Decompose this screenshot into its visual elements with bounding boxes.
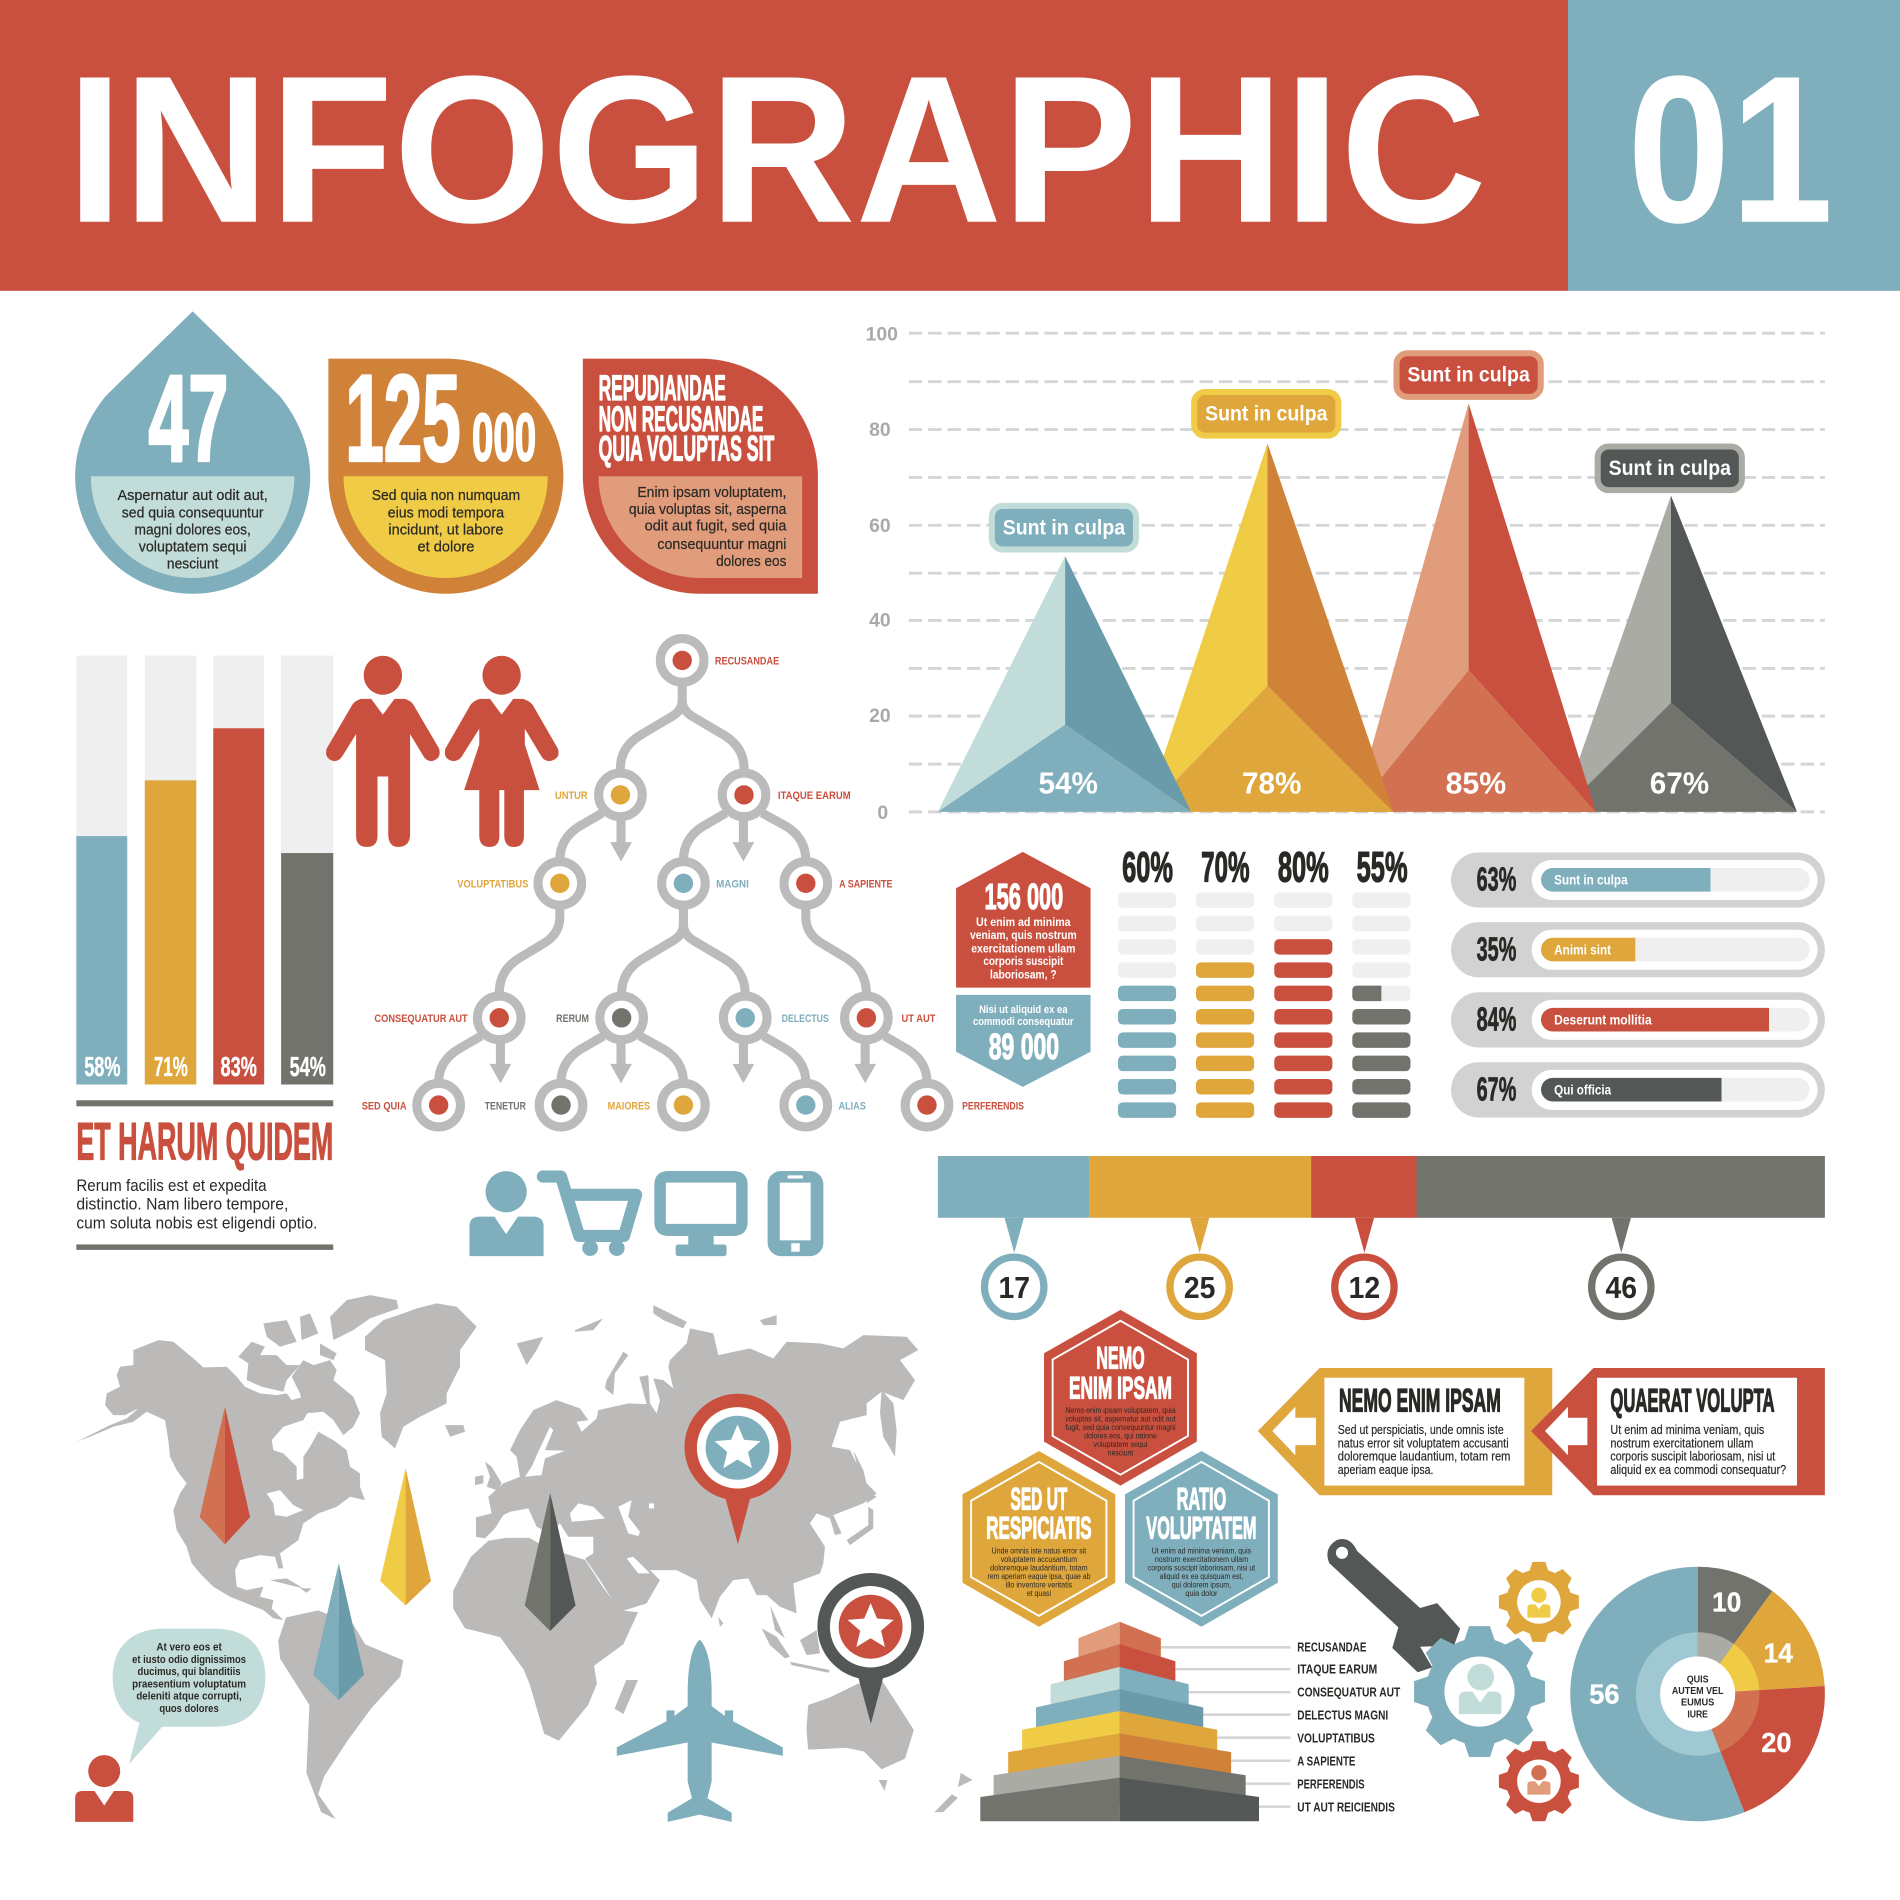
y axis labels: 100: [866, 323, 898, 345]
hexagon: sed ut respiciatis: et quasi: [1027, 1589, 1051, 1598]
drop panel: 47: nesciunt: [167, 555, 219, 572]
icon: person: [469, 1171, 544, 1256]
tree nodes: [417, 639, 949, 1127]
callout: 46: 46: [1606, 1272, 1637, 1305]
text block: et harum quidem: [76, 1100, 333, 1250]
map pin: red star pin: [685, 1394, 791, 1544]
drop panel: repudiandae: Enim ipsam voluptatem,: [637, 484, 786, 501]
tree labels: VOLUPTATIBUS: [457, 879, 528, 891]
map marker: dark spear: [525, 1493, 576, 1631]
stat: 89 000: Nisi ut aliquid ex ea: [979, 1004, 1068, 1016]
y axis labels: 60: [869, 515, 891, 537]
pyramid leader lines: [1161, 1647, 1290, 1807]
hexagon: sed ut respiciatis: RESPICIATIS: [986, 1510, 1092, 1546]
y axis labels: 40: [869, 609, 891, 631]
tooltip: red: Sunt in culpa: [1407, 364, 1530, 387]
stat: 89 000: commodi consequatur: [973, 1016, 1074, 1028]
icon: blue gear: [1414, 1626, 1545, 1757]
callout: 17: [985, 1257, 1044, 1317]
pill 63%: 63%: [1477, 862, 1516, 899]
chart: stepped pyramid: [980, 1622, 1400, 1821]
drop panel: 47: [75, 311, 310, 594]
arrow box: nemo enim ipsam: Sed ut perspiciatis, unde omnis iste: [1338, 1422, 1504, 1437]
callout: 25: 25: [1184, 1272, 1215, 1305]
y axis labels: 0: [877, 802, 888, 824]
pyramid labels: [1297, 1640, 1400, 1815]
stat: 89 000: [956, 995, 1091, 1087]
chart: donut pie: 20: [1761, 1727, 1792, 1758]
hexagon: sed ut respiciatis: [962, 1451, 1115, 1627]
tooltip: blue: Sunt in culpa: [1003, 516, 1125, 539]
chart: vertical bars: 54%: [290, 1051, 326, 1082]
hexagon: sed ut respiciatis: Unde omnis iste natus error sit: [992, 1546, 1087, 1555]
pill 84%: 84%: [1477, 1002, 1516, 1039]
stat: 89 000: 89 000: [989, 1026, 1059, 1067]
chart: donut pie: 14: [1764, 1638, 1793, 1669]
hexagon: sed ut respiciatis: rem aperiam eaque ipsa, quae ab: [987, 1572, 1091, 1581]
stat: 156 000: Ut enim ad minima: [976, 915, 1071, 929]
tree labels: UNTUR: [555, 790, 588, 802]
pill 67%: [1451, 1062, 1825, 1117]
column headings: 60%: [1122, 844, 1173, 891]
pyramid layers: [980, 1622, 1259, 1821]
pyramid: 67%: [1561, 496, 1797, 812]
icon: cart: [543, 1177, 636, 1256]
world map: [77, 1295, 973, 1819]
callout: 46: [1592, 1257, 1651, 1317]
stat: 156 000: corporis suscipit: [983, 954, 1063, 968]
pill 35%: Animi sint: [1554, 941, 1611, 957]
chart: donut pie: QUIS: [1687, 1675, 1709, 1686]
chart: segmented columns: [1118, 844, 1410, 1118]
arrow box: quaerat volupta: nostrum exercitationem ullam: [1610, 1435, 1753, 1450]
tree labels: TENETUR: [485, 1100, 526, 1112]
chart: donut pie: AUTEM VEL: [1672, 1686, 1723, 1697]
chart: donut pie: 10: [1712, 1587, 1741, 1618]
issue number: 01: [1627, 33, 1833, 267]
callout: speech bubble: ducimus, qui blanditiis: [138, 1666, 241, 1678]
callout: speech bubble: praesentium voluptatum: [132, 1678, 246, 1690]
drop panel: repudiandae: NON RECUSANDAE: [599, 400, 763, 439]
drop panel: 47: 47: [148, 349, 228, 486]
pill 63%: Sunt in culpa: [1554, 872, 1628, 888]
hexagon: nemo enim ipsam: [1044, 1310, 1197, 1486]
tree connectors: [439, 685, 927, 1082]
hexagon: nemo enim ipsam: dolores eos, qui ratione: [1084, 1431, 1157, 1440]
arrow box: quaerat volupta: aliquid ex ea commodi consequatur?: [1610, 1462, 1786, 1477]
stat: 156 000: laboriosam, ?: [990, 967, 1057, 981]
column headings: 70%: [1201, 844, 1250, 891]
drop panel: repudiandae: QUIA VOLUPTAS SIT: [599, 429, 775, 468]
tree labels: [362, 656, 1024, 1112]
chart: vertical bars: [76, 656, 333, 1085]
map: southern continents: [278, 1538, 973, 1819]
arrow box: nemo enim ipsam: NEMO ENIM IPSAM: [1339, 1382, 1501, 1419]
column headings: 55%: [1357, 844, 1408, 891]
callout: speech bubble: [113, 1629, 265, 1764]
drop panel: repudiandae: quia voluptas sit, asperna: [629, 501, 787, 518]
arrow box: nemo enim ipsam: [1258, 1368, 1552, 1495]
column 80%: [1274, 892, 1332, 1118]
arrow box: nemo enim ipsam: natus error sit voluptatem accusanti: [1338, 1435, 1509, 1450]
column 70%: [1196, 892, 1254, 1118]
hexagon: nemo enim ipsam: ENIM IPSAM: [1069, 1369, 1172, 1405]
tree arrows: [490, 842, 876, 1083]
text block: et harum quidem: Rerum facilis est et expedita: [76, 1177, 267, 1195]
icon: yellow gear: [1499, 1562, 1579, 1642]
drop panel: 125 000: 000: [472, 401, 536, 475]
pill 35%: 35%: [1477, 931, 1516, 968]
callout: speech bubble: et iusto odio dignissimos: [132, 1654, 246, 1666]
callout: 25: [1170, 1257, 1229, 1317]
chart: donut pie: 56: [1589, 1679, 1619, 1710]
icon: phone: [768, 1171, 823, 1256]
stat: 156 000: [956, 852, 1091, 988]
callout: 12: [1335, 1257, 1394, 1317]
hexagon: sed ut respiciatis: illo inventore veritatis: [1006, 1580, 1072, 1589]
hexagon: nemo enim ipsam: NEMO: [1096, 1340, 1145, 1376]
hexagon: ratio voluptatem: quia dolor: [1185, 1589, 1218, 1598]
hexagon: ratio voluptatem: VOLUPTATEM: [1146, 1510, 1257, 1546]
chart: pyramid area chart: [866, 323, 1825, 824]
map marker: yellow spear: [380, 1468, 431, 1606]
pyramid: 85%: 85%: [1446, 768, 1506, 801]
pill 84%: Deserunt mollitia: [1554, 1012, 1652, 1028]
header banner: [0, 0, 1900, 291]
stat: 156 000: 156 000: [985, 876, 1063, 917]
pyramid: 54%: [938, 556, 1191, 812]
tree node centres: [429, 651, 937, 1115]
icon: monitor: [654, 1171, 748, 1256]
chart: vertical bars: 83%: [221, 1051, 257, 1082]
column headings: [1122, 844, 1408, 891]
map: americas north: [77, 1295, 502, 1620]
drop panel: repudiandae: odit aut fugit, sed quia: [645, 518, 787, 535]
hexagon: ratio voluptatem: RATIO: [1177, 1480, 1226, 1516]
pyramid: 85%: [1354, 404, 1596, 812]
tree labels: RECUSANDAE: [715, 656, 779, 668]
hexagon: ratio voluptatem: [1125, 1451, 1278, 1627]
hexagon: nemo enim ipsam: voluptatem sequi: [1094, 1440, 1148, 1449]
pyramid: 54%: 54%: [1038, 768, 1098, 801]
pyramid labels: CONSEQUATUR AUT: [1297, 1684, 1400, 1699]
chart: vertical bars: 58%: [84, 1051, 121, 1082]
pill 67%: Qui officia: [1554, 1081, 1611, 1097]
hexagon: sed ut respiciatis: doloremque laudantium, totam: [990, 1563, 1088, 1572]
pyramid labels: A SAPIENTE: [1297, 1753, 1355, 1768]
text block: et harum quidem: distinctio. Nam libero tempore,: [76, 1195, 288, 1213]
column 55%: [1352, 892, 1410, 1118]
text block: et harum quidem: cum soluta nobis est eligendi optio.: [76, 1215, 317, 1233]
icon: red person: [75, 1755, 133, 1822]
tree labels: DELECTUS: [782, 1013, 829, 1025]
map pin: dark star pin: [817, 1573, 924, 1724]
chart: donut pie: EUMUS: [1681, 1698, 1714, 1709]
drop panel: 47: Aspernatur aut odit aut,: [118, 487, 268, 504]
arrow box: quaerat volupta: [1531, 1368, 1825, 1495]
hexagon: ratio voluptatem: corporis suscipit laboriosam, nisi ut: [1148, 1563, 1256, 1572]
pill 63%: [1451, 852, 1825, 908]
pyramid labels: RECUSANDAE: [1297, 1640, 1366, 1655]
tree labels: MAIORES: [608, 1100, 650, 1112]
tree diagram: [362, 639, 1024, 1127]
title: INFOGRAPHIC: [67, 33, 1487, 267]
tree labels: CONSEQUATUR AUT: [374, 1013, 468, 1025]
pyramid labels: PERFERENDIS: [1297, 1777, 1365, 1792]
tree labels: ITAQUE EARUM: [778, 790, 851, 802]
hexagon: nemo enim ipsam: fugit, sed quia consequuntur magni: [1065, 1423, 1176, 1432]
drop panel: 47: voluptatem sequi: [139, 538, 247, 555]
drop panel: repudiandae: REPUDIANDAE: [599, 369, 726, 408]
drop panel: repudiandae: consequuntur magni: [657, 536, 786, 553]
hexagon: ratio voluptatem: qui dolorem ipsum,: [1172, 1580, 1231, 1589]
tree labels: PERFERENDIS: [962, 1100, 1024, 1112]
arrow box: nemo enim ipsam: doloremque laudantium, totam rem: [1338, 1449, 1510, 1464]
map marker: blue spear: [313, 1563, 364, 1700]
hexagon: nemo enim ipsam: voluptas sit, aspernatur aut odit aut: [1065, 1414, 1176, 1423]
icons row: [469, 1171, 823, 1256]
drop panel: 125 000: eius modi tempora: [388, 504, 505, 521]
icon: red gear: [1499, 1741, 1579, 1821]
drop panel: 125 000: Sed quia non numquam: [372, 487, 520, 504]
pyramid: 78%: [1145, 443, 1393, 812]
hexagon: nemo enim ipsam: nesciunt: [1108, 1448, 1134, 1457]
hexagon: sed ut respiciatis: voluptatem accusantium: [1001, 1555, 1077, 1564]
pyramid labels: VOLUPTATIBUS: [1297, 1730, 1375, 1745]
pill 67%: 67%: [1477, 1071, 1516, 1108]
pill 35%: [1451, 922, 1825, 977]
column 60%: [1118, 892, 1176, 1118]
pyramid: 67%: 67%: [1650, 768, 1709, 801]
tree labels: UT AUT: [902, 1013, 936, 1025]
hexagon: nemo enim ipsam: Nemo enim ipsam voluptatem, quia: [1065, 1406, 1176, 1415]
icon: man and woman: [326, 656, 559, 847]
pyramid labels: ITAQUE EARUM: [1297, 1661, 1377, 1676]
tree labels: RERUM: [556, 1013, 589, 1025]
pyramid labels: UT AUT REICIENDIS: [1297, 1800, 1395, 1815]
drop panel: 125 000: incidunt, ut labore: [388, 521, 503, 538]
tooltip: dark: Sunt in culpa: [1609, 457, 1731, 480]
callout: speech bubble: quos dolores: [159, 1703, 219, 1715]
tooltip: yellow: Sunt in culpa: [1205, 402, 1328, 425]
hexagon: ratio voluptatem: aliquid ex ea quisquam est,: [1160, 1572, 1243, 1581]
drop panel: 47: sed quia consequuntur: [122, 504, 264, 521]
callout: 17: 17: [998, 1272, 1030, 1305]
drop panel: 125 000: 125: [345, 349, 460, 486]
chart: vertical bars: 71%: [154, 1051, 188, 1082]
pyramid: 78%: 78%: [1242, 768, 1301, 801]
map marker: red spear: [200, 1407, 250, 1544]
tooltip: blue: [992, 506, 1136, 550]
stat: 156 000: exercitationem ullam: [971, 941, 1076, 955]
tree labels: A SAPIENTE: [839, 879, 892, 891]
tooltip: yellow: [1194, 392, 1338, 436]
panel: hexagon stats: [956, 852, 1091, 1087]
y axis labels: [866, 323, 898, 824]
drop panel: 125 000: et dolore: [417, 538, 474, 555]
y axis labels: 80: [869, 419, 891, 441]
text block: et harum quidem: ET HARUM QUIDEM: [76, 1113, 333, 1172]
pill 84%: [1451, 992, 1825, 1048]
arrow box: quaerat volupta: Ut enim ad minima veniam, quis: [1610, 1422, 1764, 1437]
callout: speech bubble: deleniti atque corrupti,: [136, 1690, 242, 1702]
map: eurasia: [476, 1305, 918, 1673]
chart: donut pie: [1570, 1567, 1825, 1821]
column headings: 80%: [1278, 844, 1329, 891]
tree labels: SED QUIA: [362, 1100, 407, 1112]
hexagon: ratio voluptatem: nostrum exercitationem ullam: [1155, 1555, 1248, 1564]
chart: donut pie: IURE: [1687, 1709, 1708, 1720]
callout: speech bubble: At vero eos et: [156, 1641, 222, 1653]
arrow box: nemo enim ipsam: aperiam eaque ipsa.: [1338, 1462, 1433, 1477]
y axis labels: 20: [869, 705, 891, 727]
arrow box: quaerat volupta: corporis suscipit laboriosam, nisi ut: [1610, 1449, 1776, 1464]
chart: proportion bar with callouts: [938, 1156, 1825, 1317]
callout: 12: 12: [1349, 1272, 1380, 1305]
tree labels: ALIAS: [839, 1100, 866, 1112]
drop panel: repudiandae: [583, 359, 818, 594]
drop panel: 47: magni dolores eos,: [135, 521, 251, 538]
tree labels: MAGNI: [716, 879, 749, 891]
chart: progress pills: [1451, 852, 1825, 1117]
stat: 156 000: veniam, quis nostrum: [970, 928, 1077, 942]
tooltip: red: [1397, 353, 1541, 397]
icon: airplane: [617, 1639, 783, 1822]
tooltip: dark: [1598, 447, 1742, 490]
hexagon: sed ut respiciatis: SED UT: [1010, 1480, 1067, 1516]
icon: wrench: [1327, 1539, 1460, 1672]
hexagon: ratio voluptatem: Ut enim ad minima veniam, quis: [1152, 1546, 1251, 1555]
drop panel: 125 000: [328, 349, 563, 594]
pyramid labels: DELECTUS MAGNI: [1297, 1707, 1388, 1722]
drop panel: repudiandae: dolores eos: [716, 553, 787, 570]
